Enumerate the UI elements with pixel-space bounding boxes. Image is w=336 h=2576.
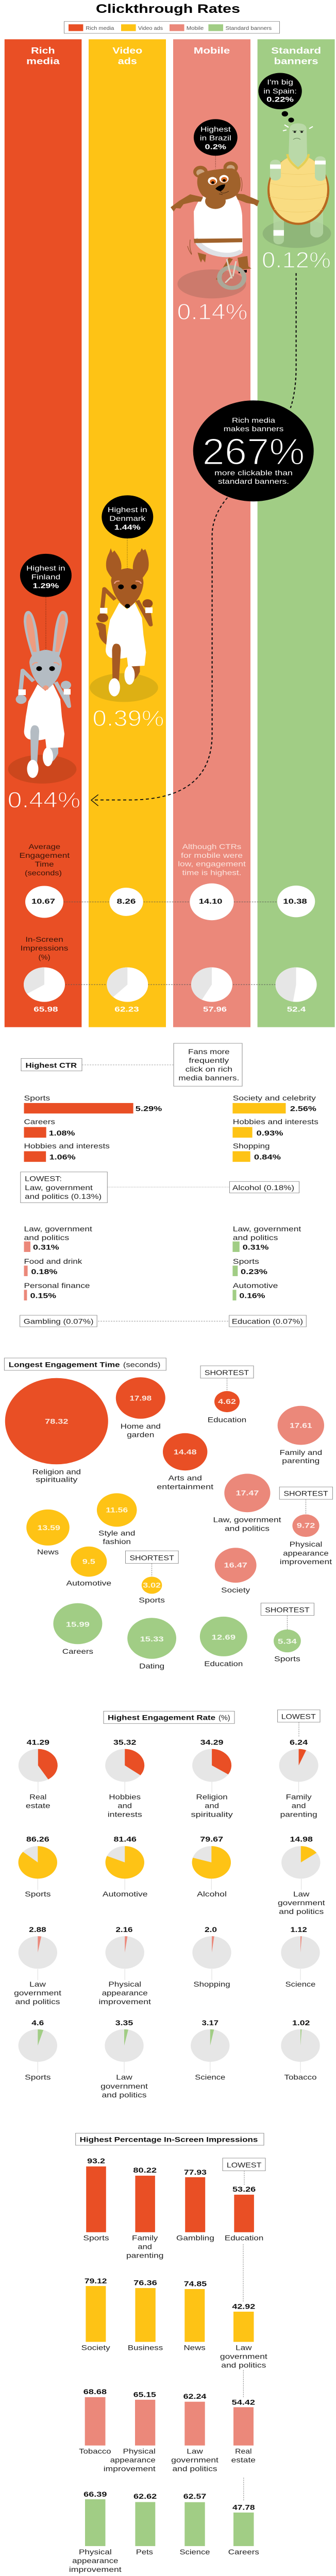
- pie chart row: standard banners engagement rate: 4.6: [31, 2019, 44, 2027]
- bar chart: standard banners in-screen: Careers: [228, 2548, 259, 2556]
- bubble chart: rich media engagement: 4.62: [218, 1398, 236, 1406]
- bubble chart: standard banners engagement: [53, 1603, 314, 1670]
- text: mobile note: Although CTRs: [182, 843, 241, 851]
- callout: Brazil bubble: in Brazil: [200, 134, 231, 142]
- callout: Brazil bubble: [194, 119, 238, 168]
- bar chart: rich media in-screen: Gambling: [176, 2234, 214, 2242]
- legend: Mobile: [187, 26, 204, 31]
- bar chart: video in-screen: government: [220, 2353, 267, 2361]
- pie chart row: rich media engagement rate: 41.29: [27, 1739, 49, 1747]
- bubble chart: rich media engagement: Education: [208, 1416, 246, 1424]
- pie chart row: mobile engagement rate: 2.0: [205, 1926, 217, 1934]
- icon: rabbit: [8, 611, 76, 784]
- bar chart: mobile in-screen: Tobacco: [79, 2447, 111, 2455]
- bar chart: standard banners highest CTR: Law, government: [233, 1225, 301, 1233]
- bubble chart: standard banners engagement: 12.69: [212, 1634, 236, 1641]
- bubble chart: rich media engagement: 14.48: [174, 1448, 197, 1456]
- bar chart: video in-screen: 74.85: [184, 2280, 207, 2288]
- callout: fans note: media banners.: [178, 1074, 239, 1082]
- callout: fans note: [174, 1043, 242, 1086]
- callout: 267% bubble: 267%: [202, 431, 305, 472]
- pie chart row: mobile engagement rate: government: [14, 1989, 62, 1997]
- pie chart row: mobile engagement rate: 1.12: [290, 1926, 307, 1934]
- panel: rich media column: [5, 39, 81, 1027]
- text: average engagement time label: Average: [29, 843, 60, 851]
- bar chart: rich media highest CTR: 5.29%: [136, 1105, 162, 1113]
- bubble chart: video engagement: fashion: [103, 1538, 131, 1546]
- text: mobile note: [178, 843, 246, 877]
- value: 0.14%: 0.14%: [177, 300, 247, 325]
- pie chart row: mobile engagement rate: Shopping: [193, 1980, 230, 1989]
- pie chart row: video engagement rate: 79.67: [200, 1836, 223, 1843]
- heading: highest CTR: Highest CTR: [25, 1062, 77, 1070]
- bar chart: mobile highest CTR: Food and drink: [24, 1258, 82, 1266]
- text: in-screen impressions label: [21, 936, 68, 961]
- heading: longest engagement time: (seconds): [123, 1361, 160, 1369]
- bubble chart: rich media engagement: Religion and: [32, 1468, 81, 1476]
- pie chart row: rich media engagement rate: Hobbies: [109, 1793, 141, 1801]
- pie chart row: video engagement rate: government: [278, 1899, 325, 1907]
- bar chart: standard banners in-screen: 62.57: [183, 2493, 207, 2501]
- bubble chart: rich media engagement: garden: [127, 1431, 154, 1439]
- callout: lowest in-screen: [223, 2158, 265, 2501]
- bar chart: mobile in-screen: Real: [235, 2447, 251, 2455]
- heading: highest CTR: [21, 1058, 174, 1071]
- callout: Spain bubble: 0.22%: [266, 96, 294, 104]
- title: Clickthrough Rates: [96, 2, 240, 16]
- bar chart: video highest CTR: Hobbies and interests: [233, 1118, 318, 1126]
- heading: standard banners: [271, 46, 321, 66]
- legend: [64, 22, 279, 33]
- icon: kangaroo: [90, 548, 158, 702]
- bar chart: standard banners in-screen: 62.62: [133, 2493, 157, 2501]
- pie chart row: rich media engagement rate: Real: [29, 1793, 46, 1801]
- chart: average engagement time circles: 14.10: [199, 897, 223, 905]
- heading: video ads: [112, 46, 142, 66]
- pie chart row: rich media engagement rate: 34.29: [200, 1739, 224, 1747]
- callout: lowest standard banners: [229, 1315, 306, 1327]
- bubble chart: rich media engagement: Home and: [121, 1422, 161, 1431]
- pie chart row: rich media engagement rate: and: [205, 1802, 219, 1810]
- arrow: dashed from bubble to rich media value: [91, 498, 227, 806]
- callout: Denmark bubble: 1.44%: [114, 523, 141, 532]
- bubble chart: rich media engagement: 17.98: [129, 1395, 152, 1402]
- heading: video ads: Video: [112, 46, 142, 56]
- bar chart: mobile in-screen: 62.24: [183, 2393, 207, 2401]
- bar chart: standard banners highest CTR: [232, 1225, 301, 1300]
- pie chart row: standard banners engagement rate: Law: [116, 2074, 132, 2081]
- bar chart: video highest CTR: Society and celebrity: [233, 1094, 316, 1103]
- callout: fans note: click on rich: [186, 1065, 232, 1074]
- bubble chart: video engagement: 9.5: [82, 1558, 95, 1566]
- heading: standard banners: Standard: [271, 46, 321, 56]
- callout: Brazil bubble: Highest: [200, 126, 231, 133]
- callout: Spain bubble: I'm big: [267, 78, 293, 87]
- bar chart: rich media highest CTR: Sports: [24, 1094, 50, 1103]
- text: mobile note: time is highest.: [182, 869, 241, 877]
- chart: in-screen impressions pies: 65.98: [33, 1006, 58, 1013]
- callout: lowest engagement rate: [278, 1710, 320, 1737]
- bubble chart: mobile engagement: Society: [221, 1586, 250, 1595]
- bar chart: video highest CTR: 0.84%: [254, 1154, 281, 1161]
- text: mobile note: low, engagement: [178, 860, 246, 868]
- bar chart: mobile highest CTR: 0.15%: [30, 1292, 56, 1300]
- heading: rich media: Rich: [31, 46, 55, 56]
- pie chart row: mobile engagement rate: Physical: [108, 1980, 141, 1989]
- heading: highest engagement rate: [104, 1711, 234, 1723]
- bar chart: standard banners highest CTR: 0.31%: [243, 1243, 268, 1251]
- bubble chart: video engagement: 11.56: [106, 1506, 128, 1514]
- bubble chart: video engagement: News: [37, 1548, 59, 1556]
- pie chart row: rich media engagement rate: and: [117, 1802, 132, 1810]
- bar chart: video in-screen: Society: [81, 2344, 110, 2352]
- bubble chart: standard banners engagement: Dating: [139, 1663, 164, 1670]
- chart: in-screen impressions pies: 52.4: [287, 1006, 306, 1013]
- bar chart: rich media highest CTR: [24, 1094, 162, 1162]
- bar chart: mobile in-screen: [79, 2388, 256, 2473]
- bar chart: mobile in-screen: government: [171, 2456, 219, 2464]
- pie chart row: video engagement rate: 81.46: [113, 1836, 137, 1843]
- bar chart: mobile in-screen: Law: [187, 2447, 203, 2455]
- bar chart: rich media in-screen: Education: [225, 2234, 263, 2242]
- bubble chart: rich media engagement: SHORTEST: [205, 1369, 249, 1377]
- pie chart row: video engagement rate: 14.98: [290, 1836, 313, 1843]
- bar chart: mobile highest CTR: 0.31%: [33, 1243, 59, 1251]
- callout: 267% bubble: more clickable than: [214, 469, 293, 477]
- pie chart row: video engagement rate: [19, 1836, 325, 1916]
- text: mobile note: for mobile were: [181, 852, 243, 860]
- text: average engagement time label: Engagement: [19, 852, 70, 860]
- bubble chart: mobile engagement: parenting: [282, 1457, 320, 1465]
- pie chart row: standard banners engagement rate: 3.35: [115, 2019, 133, 2027]
- heading: rich media: media: [26, 57, 60, 66]
- callout: lowest mobile: Gambling (0.07%): [24, 1318, 93, 1326]
- heading: longest engagement time: [4, 1358, 166, 1370]
- heading: rich media: [26, 46, 60, 66]
- callout: 267% bubble: standard banners.: [218, 478, 289, 486]
- bar chart: standard banners in-screen: appearance: [72, 2557, 119, 2565]
- bubble chart: mobile engagement: 9.72: [297, 1522, 315, 1530]
- bar chart: standard banners in-screen: improvement: [69, 2566, 122, 2574]
- bar chart: standard banners in-screen: Pets: [136, 2548, 153, 2556]
- pie chart row: standard banners engagement rate: 3.17: [202, 2019, 219, 2027]
- bubble chart: mobile engagement: improvement: [280, 1558, 332, 1566]
- bar chart: rich media in-screen: Sports: [83, 2234, 109, 2242]
- callout: lowest standard banners: Education (0.07%): [232, 1318, 303, 1326]
- bar chart: video in-screen: 42.92: [232, 2303, 256, 2311]
- icon: turtle: [263, 123, 331, 248]
- pie chart row: video engagement rate: and politics: [279, 1908, 324, 1916]
- callout: Brazil bubble: 0.2%: [205, 143, 226, 151]
- pie chart row: mobile engagement rate: and politics: [15, 1998, 60, 2006]
- legend: Rich media: [86, 26, 114, 31]
- bubble chart: video engagement: 3.02: [143, 1582, 161, 1589]
- bar chart: video in-screen: 76.36: [133, 2279, 157, 2287]
- bar chart: standard banners in-screen: Science: [179, 2548, 210, 2556]
- bubble chart: rich media engagement: 78.32: [45, 1417, 69, 1426]
- callout: Denmark bubble: Denmark: [109, 515, 145, 522]
- bar chart: video in-screen: Business: [128, 2344, 163, 2352]
- bubble chart: video engagement: Style and: [98, 1530, 135, 1537]
- bar chart: rich media highest CTR: 1.08%: [49, 1129, 75, 1138]
- pie chart row: rich media engagement rate: estate: [26, 1802, 51, 1810]
- bar chart: rich media in-screen: [83, 2157, 263, 2260]
- pie chart row: video engagement rate: Automotive: [103, 1890, 148, 1898]
- chart: average engagement time circles: 10.67: [31, 897, 55, 905]
- bar chart: standard banners highest CTR: 0.23%: [241, 1268, 267, 1276]
- bubble chart: standard banners engagement: Careers: [62, 1648, 93, 1656]
- bar chart: mobile highest CTR: and politics: [24, 1234, 69, 1242]
- bubble chart: mobile engagement: 17.61: [290, 1422, 312, 1430]
- pie chart row: standard banners engagement rate: Science: [195, 2074, 226, 2081]
- pie chart row: mobile engagement rate: appearance: [102, 1989, 148, 1997]
- callout: fans note: frequently: [189, 1057, 229, 1065]
- pie chart row: rich media engagement rate: interests: [108, 1811, 142, 1819]
- bubble chart: video engagement: Automotive: [66, 1580, 111, 1587]
- pie chart row: standard banners engagement rate: 1.02: [292, 2019, 310, 2027]
- pie chart row: standard banners engagement rate: and politics: [102, 2091, 147, 2099]
- bar chart: mobile in-screen: estate: [231, 2456, 256, 2464]
- bar chart: standard banners in-screen: 66.39: [83, 2490, 107, 2498]
- bubble chart: standard banners engagement: SHORTEST: [265, 1606, 310, 1614]
- bar chart: video in-screen: [81, 2277, 267, 2369]
- bar chart: mobile in-screen: improvement: [104, 2465, 156, 2473]
- bar chart: mobile highest CTR: [24, 1225, 93, 1300]
- callout: Spain bubble: [258, 73, 302, 123]
- bar chart: mobile in-screen: and politics: [172, 2465, 217, 2473]
- heading: mobile: Mobile: [194, 46, 230, 56]
- arrow: dashed from standard banners to rich media: [291, 273, 296, 408]
- bubble chart: mobile engagement: [213, 1406, 332, 1595]
- heading: standard banners: banners: [274, 57, 318, 66]
- value: 0.44%: 0.44%: [8, 788, 80, 813]
- callout: lowest rich media: LOWEST:: [25, 1175, 62, 1183]
- bubble chart: mobile engagement: Law, government: [213, 1516, 281, 1524]
- callout: lowest in-screen: LOWEST: [227, 2161, 262, 2170]
- legend: Video ads: [138, 26, 163, 31]
- pie chart row: rich media engagement rate: and: [292, 1802, 306, 1810]
- bar chart: rich media highest CTR: Hobbies and interests: [24, 1142, 110, 1150]
- text: average engagement time label: Time: [35, 860, 54, 869]
- bubble chart: mobile engagement: appearance: [283, 1550, 329, 1557]
- bar chart: mobile in-screen: 65.15: [133, 2391, 156, 2399]
- chart: average engagement time circles: 10.38: [283, 897, 307, 905]
- bubble chart: video engagement: [26, 1493, 178, 1604]
- pie chart row: rich media engagement rate: [19, 1739, 318, 1819]
- callout: lowest rich media: and politics (0.13%): [25, 1193, 102, 1201]
- bubble chart: video engagement: Sports: [139, 1597, 165, 1604]
- chart: in-screen impressions pies: 57.96: [203, 1006, 227, 1013]
- callout: 267% bubble: [193, 400, 314, 501]
- bubble chart: mobile engagement: Family and: [279, 1449, 322, 1457]
- bubble chart: rich media engagement: spirituality: [36, 1476, 78, 1484]
- callout: 267% bubble: makes banners: [224, 425, 283, 433]
- bar chart: rich media in-screen: and: [138, 2243, 152, 2251]
- pie chart row: video engagement rate: Alcohol: [197, 1890, 227, 1898]
- bar chart: standard banners in-screen: [69, 2490, 259, 2574]
- text: in-screen impressions label: (%): [38, 954, 50, 961]
- heading: video ads: ads: [118, 57, 137, 66]
- bar chart: rich media in-screen: 80.22: [133, 2166, 157, 2175]
- legend: Standard banners: [225, 26, 272, 31]
- bar chart: rich media in-screen: parenting: [126, 2252, 163, 2260]
- bar chart: standard banners highest CTR: Sports: [233, 1258, 259, 1266]
- pie chart row: standard banners engagement rate: [19, 2019, 320, 2099]
- bar chart: mobile highest CTR: Law, government: [24, 1225, 93, 1233]
- text: average engagement time label: [19, 843, 70, 877]
- bar chart: standard banners highest CTR: 0.16%: [239, 1292, 265, 1300]
- pie chart row: standard banners engagement rate: Tobacco: [284, 2074, 317, 2081]
- bar chart: mobile in-screen: 68.68: [83, 2388, 107, 2396]
- text: average engagement time label: (seconds): [25, 869, 62, 877]
- chart: average engagement time circles: 8.26: [116, 897, 136, 905]
- pie chart row: mobile engagement rate: Science: [285, 1980, 316, 1989]
- pie chart row: video engagement rate: Law: [293, 1890, 310, 1898]
- pie chart row: video engagement rate: 86.26: [26, 1836, 49, 1843]
- pie chart row: rich media engagement rate: 35.32: [113, 1739, 137, 1747]
- bar chart: video highest CTR: Shopping: [233, 1142, 270, 1150]
- bubble chart: video engagement: SHORTEST: [129, 1554, 174, 1562]
- pie chart row: rich media engagement rate: parenting: [280, 1811, 317, 1819]
- bubble chart: mobile engagement: and politics: [225, 1525, 270, 1533]
- pie chart row: standard banners engagement rate: government: [100, 2082, 148, 2091]
- bar chart: rich media highest CTR: 1.06%: [49, 1154, 76, 1161]
- callout: Denmark bubble: [102, 495, 153, 568]
- pie chart row: mobile engagement rate: improvement: [98, 1998, 152, 2006]
- callout: Spain bubble: in Spain:: [263, 88, 297, 95]
- callout: Finland bubble: Finland: [31, 573, 60, 581]
- bar chart: video in-screen: Law: [236, 2344, 252, 2352]
- callout: Finland bubble: 1.29%: [33, 582, 59, 590]
- callout: Finland bubble: [20, 554, 72, 650]
- callout: 267% bubble: Rich media: [232, 417, 275, 425]
- bar chart: standard banners in-screen: 47.78: [232, 2504, 255, 2512]
- bubble chart: mobile engagement: Physical: [290, 1540, 322, 1549]
- bubble chart: rich media engagement: [5, 1366, 254, 1491]
- pie chart row: standard banners engagement rate: Sports: [25, 2074, 51, 2081]
- callout: lowest rich media: Law, government: [25, 1184, 93, 1192]
- pie chart row: rich media engagement rate: Family: [286, 1793, 312, 1801]
- bar chart: mobile in-screen: Physical: [123, 2447, 156, 2455]
- pie chart row: mobile engagement rate: 2.16: [115, 1926, 133, 1934]
- heading: longest engagement time: Longest Engagement Time: [9, 1361, 120, 1369]
- text: in-screen impressions label: In-Screen: [25, 936, 63, 944]
- pie chart row: rich media engagement rate: Religion: [196, 1793, 228, 1801]
- pie chart row: mobile engagement rate: Law: [29, 1980, 46, 1989]
- callout: Finland bubble: Highest in: [26, 565, 65, 572]
- heading: highest engagement rate: Highest Engagement Rate: [108, 1714, 215, 1722]
- bar chart: video in-screen: News: [183, 2344, 206, 2352]
- bubble chart: video engagement: 13.59: [37, 1524, 60, 1532]
- heading: highest percentage in-screen impressions: [76, 2133, 264, 2145]
- bubble chart: rich media engagement: Arts and: [168, 1474, 202, 1482]
- bubble chart: mobile engagement: 17.47: [236, 1489, 259, 1497]
- pie chart row: video engagement rate: Sports: [25, 1890, 51, 1898]
- pie chart row: mobile engagement rate: 2.88: [29, 1926, 46, 1934]
- panel: video ads column: [89, 39, 166, 1027]
- bar chart: video highest CTR: 2.56%: [290, 1105, 316, 1113]
- panel: mobile column: [173, 39, 250, 1027]
- heading: highest percentage in-screen impressions: Highest Percentage In-Screen Impressions: [80, 2136, 258, 2144]
- bubble chart: standard banners engagement: Sports: [274, 1655, 300, 1663]
- callout: lowest mobile: [20, 1315, 229, 1327]
- panel: standard banners column: [258, 39, 335, 1027]
- bubble chart: standard banners engagement: 15.33: [140, 1635, 164, 1643]
- bar chart: mobile highest CTR: 0.18%: [31, 1268, 57, 1276]
- callout: lowest video: Alcohol (0.18%): [232, 1184, 294, 1192]
- chart: in-screen impressions pies: 62.23: [114, 1006, 139, 1013]
- bubble chart: rich media engagement: entertainment: [157, 1483, 214, 1491]
- bar chart: mobile highest CTR: Personal finance: [24, 1282, 90, 1290]
- bar chart: standard banners highest CTR: and politics: [233, 1234, 278, 1242]
- chart: in-screen impressions pies: [24, 968, 317, 1013]
- icon: bear: [171, 161, 259, 298]
- bar chart: rich media in-screen: 77.93: [184, 2168, 207, 2177]
- bar chart: rich media highest CTR: Careers: [24, 1118, 55, 1126]
- chart: average engagement time circles: [25, 884, 315, 920]
- value: 0.39%: 0.39%: [92, 706, 164, 731]
- text: in-screen impressions label: Impressions: [21, 944, 68, 953]
- pie chart row: rich media engagement rate: 6.24: [290, 1739, 308, 1747]
- callout: lowest rich media: [21, 1172, 229, 1203]
- callout: lowest video: [230, 1181, 299, 1193]
- callout: fans note: Fans more: [188, 1048, 230, 1056]
- bar chart: standard banners in-screen: Physical: [79, 2548, 112, 2556]
- bar chart: mobile in-screen: appearance: [110, 2456, 156, 2464]
- bubble chart: mobile engagement: 16.47: [224, 1562, 247, 1569]
- bar chart: rich media in-screen: Family: [132, 2234, 158, 2242]
- bubble chart: mobile engagement: SHORTEST: [283, 1490, 328, 1498]
- pie chart row: rich media engagement rate: spirituality: [191, 1811, 233, 1819]
- bar chart: video in-screen: and politics: [221, 2361, 266, 2369]
- bar chart: video highest CTR: [232, 1094, 318, 1162]
- callout: lowest engagement rate: LOWEST: [281, 1713, 316, 1721]
- bubble chart: standard banners engagement: Education: [204, 1660, 243, 1668]
- callout: Denmark bubble: Highest in: [108, 506, 147, 514]
- bar chart: mobile in-screen: 54.42: [232, 2399, 255, 2406]
- bubble chart: standard banners engagement: 15.99: [66, 1621, 90, 1629]
- bar chart: video in-screen: 79.12: [85, 2277, 107, 2285]
- bar chart: standard banners highest CTR: Automotive: [233, 1282, 278, 1290]
- bar chart: rich media in-screen: 93.2: [87, 2157, 105, 2165]
- pie chart row: mobile engagement rate: [14, 1926, 320, 2006]
- value: 0.12%: 0.12%: [262, 248, 331, 273]
- bubble chart: standard banners engagement: 5.34: [278, 1637, 297, 1646]
- bar chart: rich media in-screen: 53.26: [232, 2185, 256, 2194]
- heading: highest engagement rate: (%): [219, 1714, 230, 1722]
- bar chart: video highest CTR: 0.93%: [256, 1129, 283, 1138]
